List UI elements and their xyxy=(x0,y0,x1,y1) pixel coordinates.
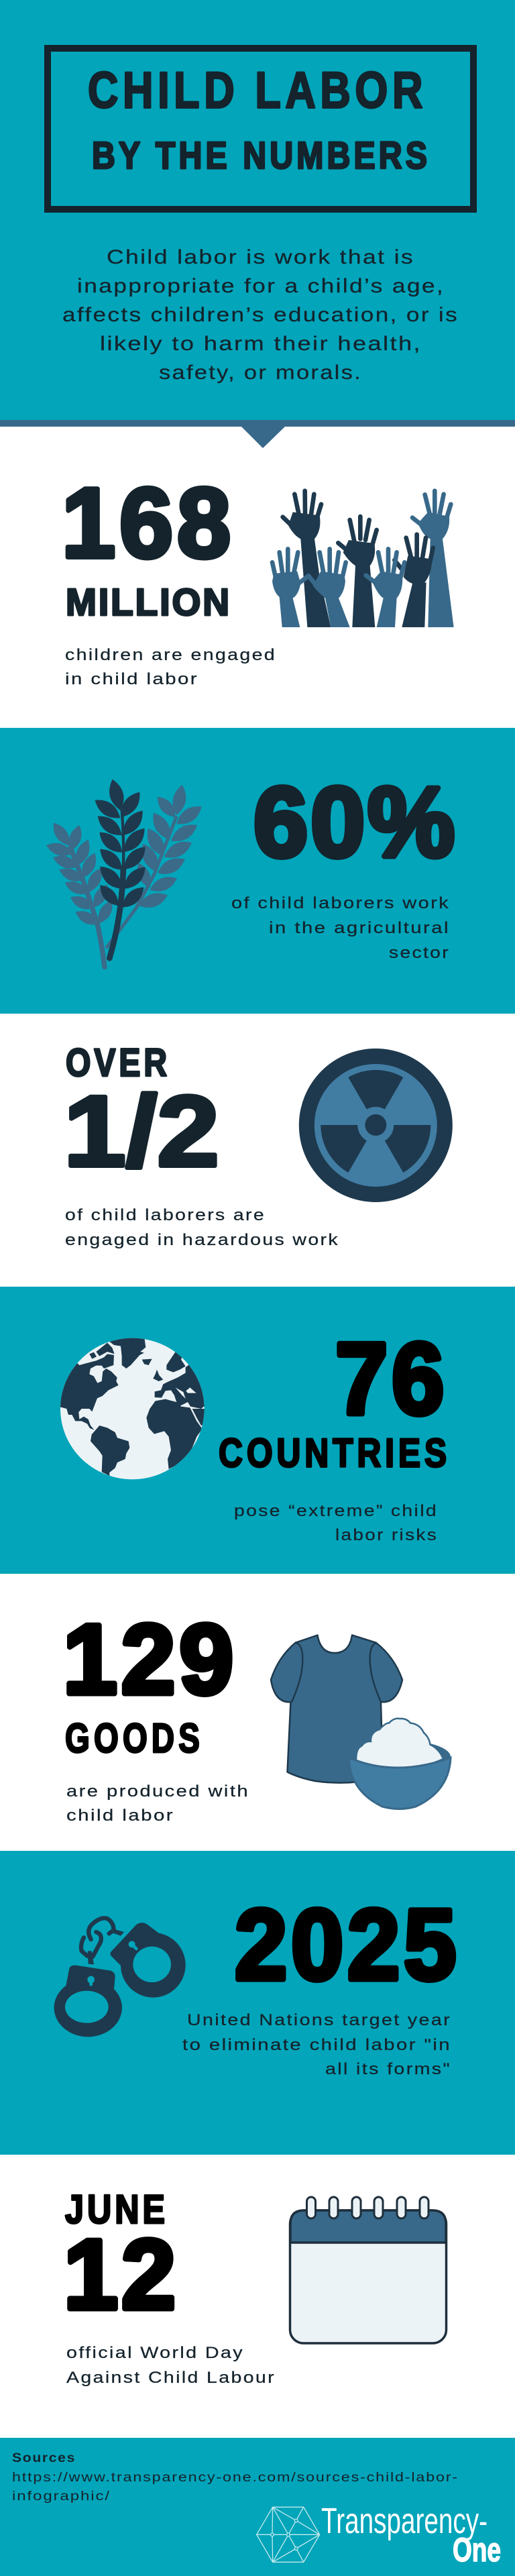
header band and pointer xyxy=(0,420,515,448)
statistic: over 1/2: OVER xyxy=(66,1041,170,1085)
statistic: 60%: 60% xyxy=(253,767,457,877)
title xyxy=(88,62,431,177)
caption xyxy=(231,894,450,962)
sources: https://www.transparency-one.com/sources-child-labor- xyxy=(12,2471,459,2485)
caption: in child labor xyxy=(65,670,198,688)
panel: june 12 xyxy=(64,2187,447,2387)
statistic: 76 countries: COUNTRIES xyxy=(219,1430,451,1476)
panel: 168 million xyxy=(62,468,454,688)
icon: t-shirt xyxy=(271,1635,402,1783)
caption: to eliminate child labor "in xyxy=(182,2036,451,2054)
panel: 60% agriculture xyxy=(0,728,515,1014)
statistic: 2025: 2025 xyxy=(235,1888,460,2000)
caption: labor risks xyxy=(335,1526,438,1544)
intro text: affects children’s education, or is xyxy=(62,304,459,326)
sources xyxy=(12,2451,459,2504)
caption: child labor xyxy=(66,1807,174,1825)
caption xyxy=(182,2011,451,2078)
title: CHILD LABOR xyxy=(88,62,427,119)
sources: Sources xyxy=(12,2451,76,2465)
caption: of child laborers are xyxy=(65,1206,266,1224)
icon: rice bowl xyxy=(349,1719,451,1809)
panel: header xyxy=(0,0,515,421)
intro text: inappropriate for a child’s age, xyxy=(77,275,445,297)
panel: over 1/2 xyxy=(64,1041,453,1249)
statistic: 129 goods: GOODS xyxy=(65,1715,204,1761)
statistic: 168 million xyxy=(62,468,235,624)
icon: calendar xyxy=(290,2197,447,2343)
statistic: 129 goods xyxy=(63,1605,237,1761)
caption: are produced with xyxy=(66,1782,249,1801)
statistic: 129 goods: 129 xyxy=(63,1605,237,1715)
caption xyxy=(65,1206,339,1249)
statistic: over 1/2 xyxy=(64,1041,219,1187)
panel: 76 countries xyxy=(0,1287,515,1574)
caption: all its forms" xyxy=(325,2060,451,2078)
statistic: over 1/2: 1/2 xyxy=(64,1075,219,1187)
caption: engaged in hazardous work xyxy=(65,1231,339,1249)
panel: 129 goods xyxy=(63,1605,451,1825)
caption xyxy=(234,1502,438,1544)
intro text: safety, or morals. xyxy=(159,362,362,384)
icon: globe xyxy=(58,1334,210,1479)
panel: footer xyxy=(0,2438,515,2576)
statistic: june 12: 12 xyxy=(64,2219,179,2330)
caption: of child laborers work xyxy=(231,894,450,912)
statistic: 76 countries xyxy=(219,1322,451,1476)
caption: official World Day xyxy=(66,2344,244,2362)
title: BY THE NUMBERS xyxy=(92,134,431,177)
caption xyxy=(66,2344,276,2387)
caption xyxy=(65,646,276,688)
icon: raised hands xyxy=(272,491,454,627)
caption: sector xyxy=(389,944,450,962)
intro text xyxy=(62,246,459,384)
statistic: 168 million: 168 xyxy=(62,468,235,578)
logo: Transparency-One xyxy=(257,2501,501,2569)
icon: wheat xyxy=(46,780,202,967)
statistic: june 12: JUNE xyxy=(65,2187,168,2232)
panel: 2025 xyxy=(0,1851,515,2155)
title frame xyxy=(48,48,473,209)
sources: infographic/ xyxy=(12,2489,111,2504)
statistic: 168 million: MILLION xyxy=(66,581,231,624)
statistic: 76 countries: 76 xyxy=(335,1322,448,1436)
icon: radiation symbol xyxy=(299,1049,453,1202)
icon: handcuffs xyxy=(54,1918,186,2037)
intro text: likely to harm their health, xyxy=(100,333,422,355)
intro text: Child labor is work that is xyxy=(107,246,414,268)
caption: children are engaged xyxy=(65,646,276,664)
caption xyxy=(66,1782,249,1825)
caption: Against Child Labour xyxy=(66,2369,276,2387)
caption: in the agricultural xyxy=(269,919,450,937)
caption: United Nations target year xyxy=(187,2011,451,2029)
caption: pose “extreme” child xyxy=(234,1502,438,1520)
